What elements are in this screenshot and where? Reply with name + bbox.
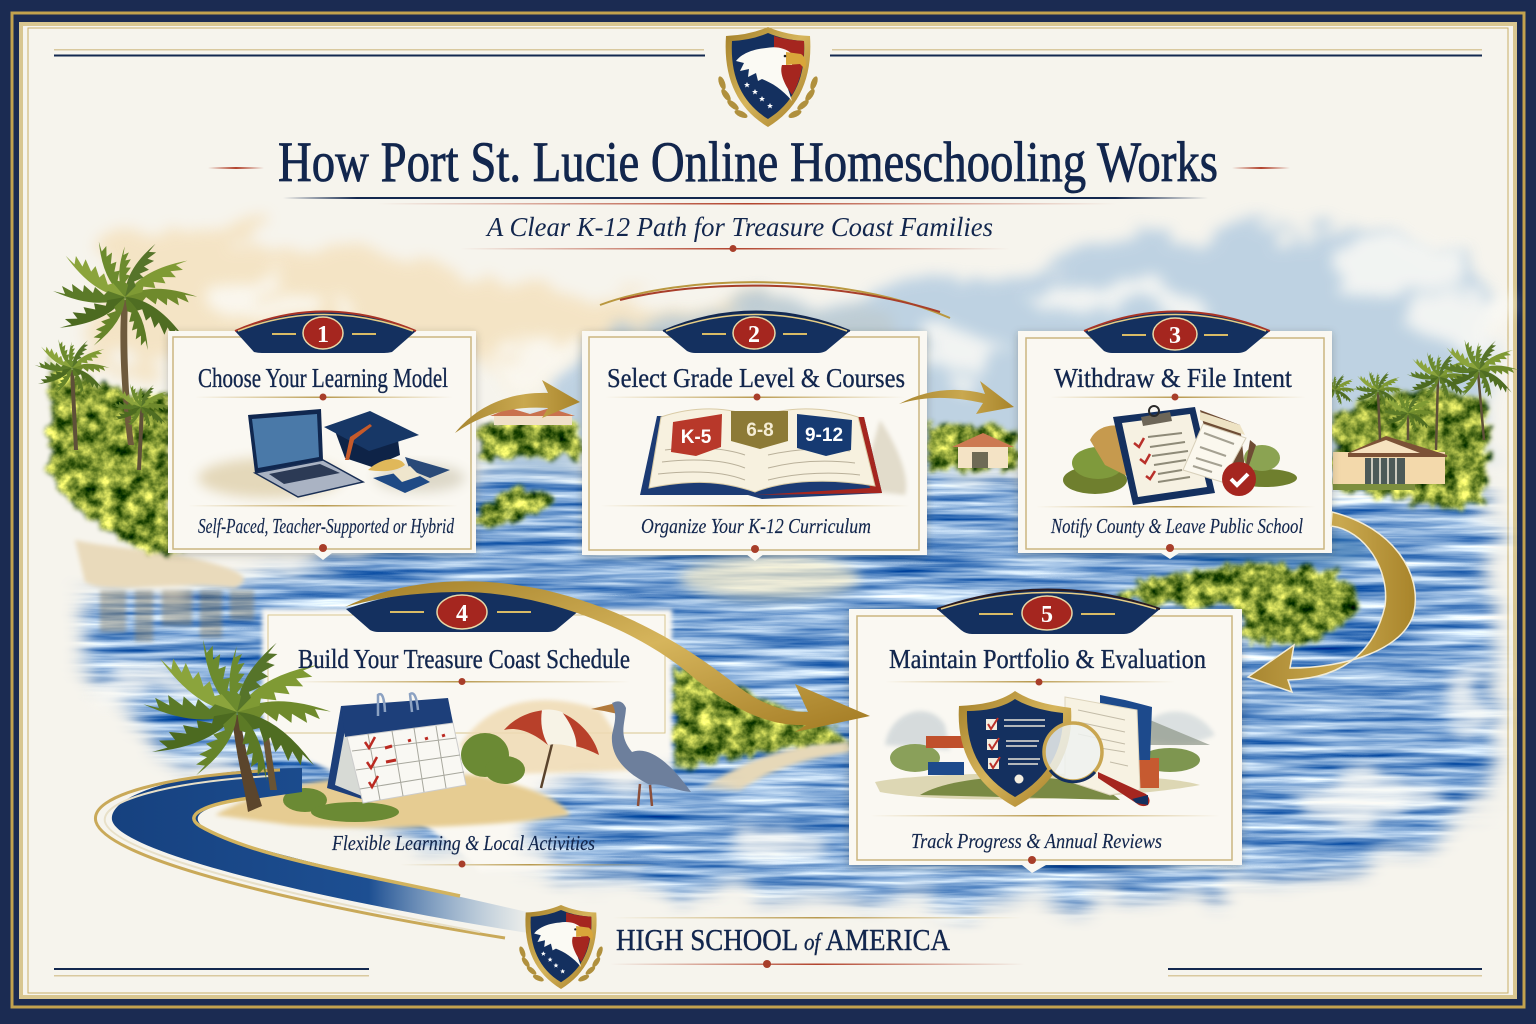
mid bank 1 <box>478 418 582 458</box>
step 1 heading: Choose Your Learning Model <box>198 363 448 393</box>
step 4 lower divider <box>400 860 660 868</box>
subtitle divider <box>460 245 1010 252</box>
step 5 heading: Maintain Portfolio & Evaluation <box>889 644 1206 674</box>
brand name: HIGH SCHOOL of AMERICA <box>616 922 951 957</box>
step 4 top divider <box>290 678 630 685</box>
watercolor landscape background <box>35 227 1519 901</box>
water: deep blue inlet below step 3 <box>1190 530 1370 570</box>
title: How Port St. Lucie Online Homeschooling Works <box>278 131 1218 194</box>
step 4 water reflection <box>530 781 730 885</box>
icon: laptop and graduation cap <box>198 409 465 498</box>
water: sunlight glimmer <box>680 556 860 600</box>
step 5 top divider <box>885 678 1175 686</box>
palm trees small left <box>35 338 172 470</box>
arrow: step 2 to step 3 <box>899 381 1014 414</box>
top rule right <box>830 49 1482 56</box>
top logo shield <box>717 27 819 127</box>
bottom logo shield <box>518 905 604 989</box>
palm tree large left <box>53 238 198 445</box>
palm tree in front of step 4 <box>143 636 332 812</box>
step 4 caption: Flexible Learning & Local Activities <box>331 831 595 855</box>
step 4 badge: 4 <box>456 601 468 627</box>
step 2 badge <box>663 312 850 353</box>
bottom rule right <box>1168 968 1482 976</box>
arrow: step 3 to step 5 <box>1248 512 1415 692</box>
tab 6-8: 6-8 <box>746 420 774 441</box>
step 2 pointer <box>746 545 764 561</box>
step 3 pointer <box>1161 544 1179 559</box>
step 1 pointer <box>314 544 332 560</box>
green bank between cards 4 and 5 <box>672 662 850 770</box>
icon: open book with grade tabs <box>640 409 906 499</box>
winding navy road <box>95 768 540 938</box>
step 2 heading: Select Grade Level & Courses <box>607 363 905 393</box>
step 4 scene trees <box>283 733 525 822</box>
icon: beach umbrella <box>504 709 599 788</box>
step 2 top divider <box>605 394 905 400</box>
step 3 badge <box>1084 312 1270 353</box>
icon: heron <box>591 701 691 806</box>
water: shore reflections below step 1 <box>100 590 254 642</box>
title underline <box>283 197 1208 204</box>
arrow: step 1 to step 2 <box>455 380 580 433</box>
title flourish left <box>208 167 264 169</box>
step 3 lower divider <box>1036 506 1316 508</box>
mid bank 2 <box>927 423 1018 470</box>
sandy strip <box>700 742 850 790</box>
icon: shield, documents and magnifier <box>875 691 1215 807</box>
step 3 badge: 3 <box>1169 323 1181 349</box>
step 5 pointer <box>1022 856 1046 873</box>
step 1 top divider <box>195 394 453 400</box>
icon: clipboard with checklist <box>1063 406 1297 505</box>
step 4 badge <box>346 590 581 632</box>
water: cloud reflections <box>100 658 1492 861</box>
icon: desk calendar <box>327 693 466 803</box>
step 2 caption: Organize Your K-12 Curriculum <box>641 514 871 538</box>
step 1 caption: Self-Paced, Teacher-Supported or Hybrid <box>198 514 454 538</box>
bottom rule left <box>54 968 369 976</box>
step 3 top divider <box>1050 394 1306 400</box>
house on right shore <box>1333 436 1447 490</box>
water <box>82 465 1490 901</box>
left vegetation <box>48 355 185 555</box>
step 5 caption: Track Progress & Annual Reviews <box>911 829 1162 853</box>
tab K-5: K-5 <box>681 427 712 448</box>
step 1 lower divider <box>188 505 458 506</box>
panel: step 4 <box>95 590 730 938</box>
panel: step 2 <box>582 312 927 561</box>
step 4 heading: Build Your Treasure Coast Schedule <box>298 644 630 674</box>
step 5 lower divider <box>870 815 1220 816</box>
step 1 badge <box>235 312 416 353</box>
brand rule below <box>610 960 1025 968</box>
step 3 caption: Notify County & Leave Public School <box>1050 514 1303 538</box>
tab K-5 <box>671 414 722 456</box>
tab 9-12 <box>797 414 852 456</box>
tab 6-8 <box>731 411 788 449</box>
island behind card 5 <box>1110 565 1357 648</box>
sky: warm sunrise wash <box>80 231 900 370</box>
panel: step 1 <box>168 312 476 560</box>
right vegetation <box>1332 387 1490 507</box>
step 1 badge: 1 <box>317 322 329 348</box>
step 2 badge: 2 <box>748 322 760 348</box>
brand rule above <box>612 917 1022 918</box>
panel: step 5 <box>849 590 1242 873</box>
top thin arc <box>600 282 950 318</box>
building on far shore <box>490 408 575 425</box>
palm trees right <box>1313 338 1519 450</box>
panel: step 3 <box>1018 312 1332 559</box>
step 5 badge <box>937 590 1160 634</box>
house near card 3 <box>952 433 1014 468</box>
sky: white clouds <box>200 237 1505 378</box>
top rule left <box>54 49 705 56</box>
step 4 scene hills <box>460 700 640 775</box>
arrow: step 4 to step 5 <box>345 581 870 732</box>
step 4 scene sand <box>215 774 570 828</box>
tab 9-12: 9-12 <box>805 425 843 446</box>
sky: blue wash <box>480 227 1490 470</box>
step 2 lower divider <box>600 505 910 506</box>
step 3 heading: Withdraw & File Intent <box>1054 363 1292 393</box>
title flourish right <box>1232 167 1290 169</box>
mid bank 1 lower <box>478 488 552 528</box>
left shore sand <box>75 540 244 588</box>
subtitle: A Clear K-12 Path for Treasure Coast Families <box>485 212 993 242</box>
step 5 badge: 5 <box>1041 602 1053 628</box>
